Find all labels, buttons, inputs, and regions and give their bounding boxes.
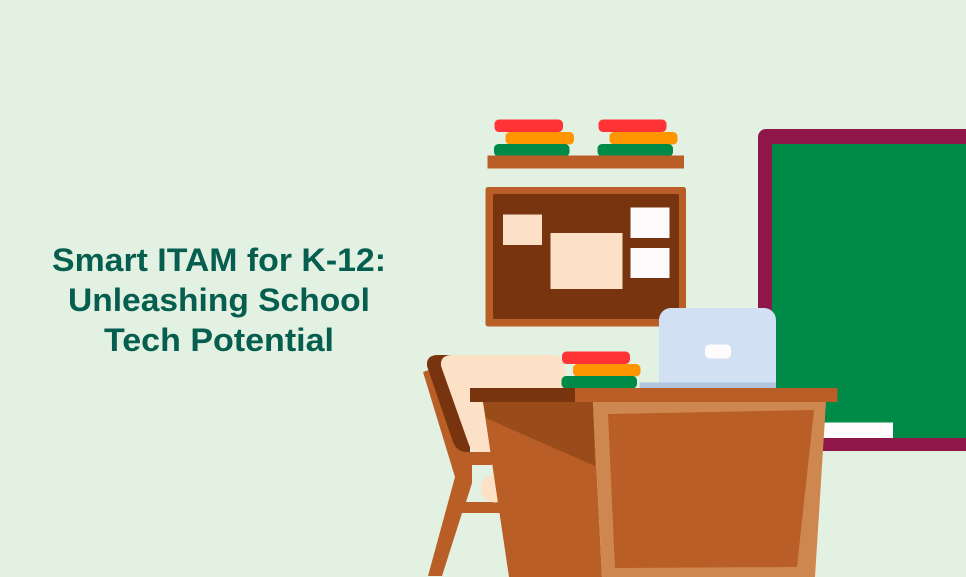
chair — [423, 355, 567, 576]
desk books — [562, 352, 640, 388]
shelf — [488, 156, 684, 168]
desk — [470, 388, 838, 577]
desk top — [470, 388, 575, 402]
chair back — [427, 355, 470, 452]
title: Tech Potential — [104, 322, 334, 358]
seat cushion knob — [481, 474, 509, 502]
laptop — [640, 308, 776, 388]
book stacks on shelf — [494, 120, 678, 156]
desk side — [483, 402, 602, 577]
title: Smart ITAM for K-12: — [52, 242, 386, 278]
chair frame — [423, 370, 500, 576]
title: Unleashing School — [68, 282, 370, 318]
bulletin board — [486, 187, 686, 326]
blackboard — [758, 129, 966, 451]
desk front panel — [593, 402, 826, 577]
title — [52, 242, 386, 358]
desk front inset — [608, 410, 814, 568]
desk side shadow — [483, 402, 595, 466]
chair cushion — [441, 355, 567, 452]
